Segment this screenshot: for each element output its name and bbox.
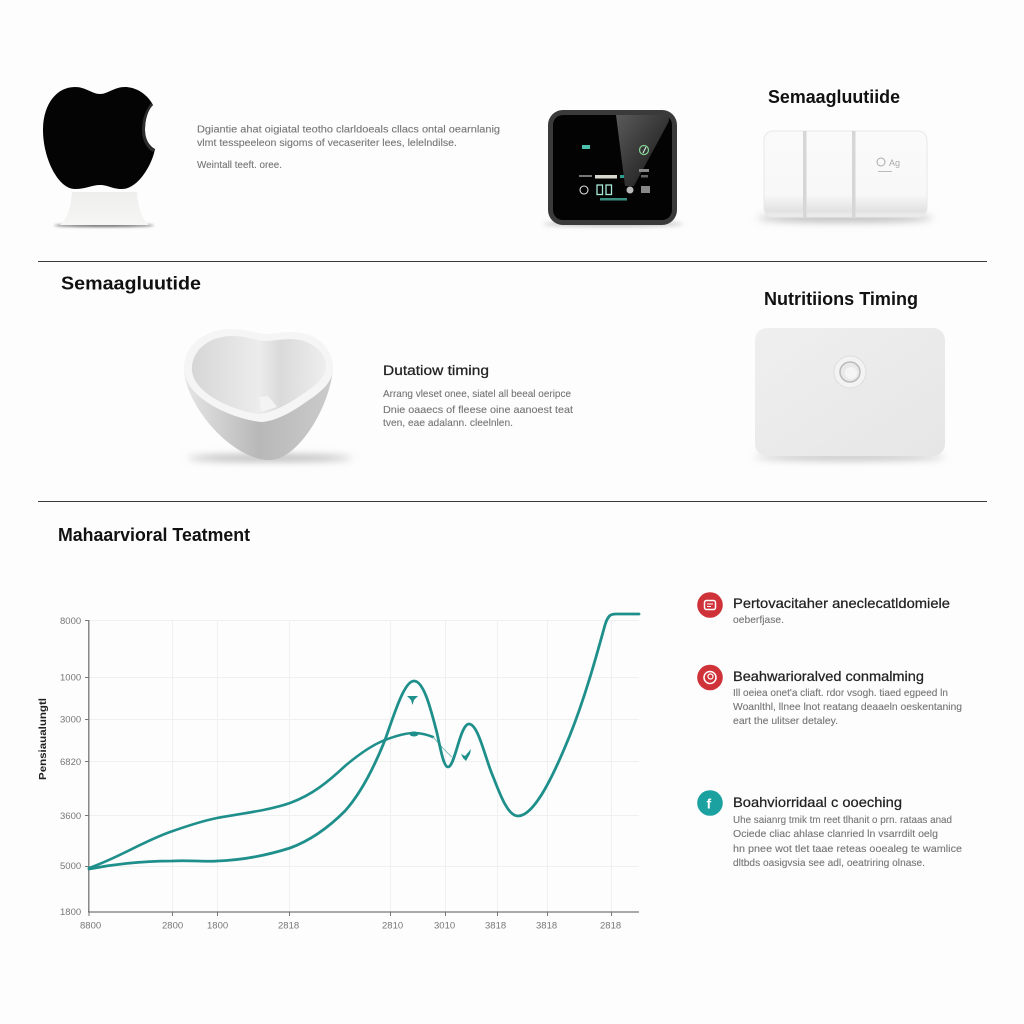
x axis labels: 2818 xyxy=(278,920,299,932)
line chart xyxy=(38,614,639,932)
heading: Semaglutide left: Semaagluutide xyxy=(61,274,201,294)
list item: third: hn pnee wot tlet taae reteas ooealeg te wamlice xyxy=(733,843,962,855)
text block: intro description: Weintall teeft. oree. xyxy=(197,159,282,171)
icon: white pill pack: Ag xyxy=(889,158,900,168)
list item: first xyxy=(697,592,950,626)
y axis labels: 1000 xyxy=(60,672,81,684)
text block: intro description: vlmt tesspeeleon sigoms of vecaseriter lees, lelelndilse. xyxy=(197,137,457,149)
y axis labels: 3000 xyxy=(60,714,81,726)
list item: third: Boahviorridaal c ooeching xyxy=(733,794,902,810)
y axis title: Pensiaualungtl xyxy=(38,698,49,780)
x axis labels: 8800 xyxy=(80,920,101,932)
icon: white heart-shaped bowl xyxy=(184,329,352,461)
heading: Nutrition Timing: Nutritiions Timing xyxy=(764,289,918,309)
y axis labels: 1800 xyxy=(60,907,81,918)
x axis labels: 3010 xyxy=(434,920,455,932)
list item: second: Ill oeiea onet'a cliaft. rdor vsogh. tiaed egpeed ln xyxy=(733,687,948,699)
icon: teal badge: f xyxy=(706,796,712,812)
icon: black apple on stand xyxy=(43,87,155,227)
list item: first: oeberfjase. xyxy=(733,614,784,626)
list item: first: Pertovacitaher aneclecatldomiele xyxy=(733,595,950,611)
screen readouts xyxy=(579,145,650,200)
list item: third: Uhe saianrg tmik tm reet tlhanit o prn. rataas anad xyxy=(733,814,952,826)
y axis labels: 6820 xyxy=(60,757,81,768)
icon: teal badge xyxy=(697,790,723,816)
x axis labels: 2810 xyxy=(382,920,403,932)
list item: second: Woanlthl, llnee lnot reatang deaaeln oeskentaning xyxy=(733,701,962,713)
list item: second: eart the ulitser detaley. xyxy=(733,715,838,727)
screen glare xyxy=(616,115,669,186)
marker: arrow on peak xyxy=(407,696,418,705)
heading: Behavioral Treatment: Mahaarvioral Teatment xyxy=(58,525,250,545)
list item: third: dltbds oasigvsia see adl, oeatriring olnase. xyxy=(733,857,925,869)
icon: white pill pack xyxy=(757,131,933,222)
curve: main oscillating line xyxy=(89,614,639,869)
marker: dot on smooth curve xyxy=(410,732,418,736)
icon: red spiral badge xyxy=(697,665,723,690)
icon: red badge xyxy=(697,592,723,618)
y axis labels: 3600 xyxy=(60,811,81,822)
icon: white rounded box device xyxy=(755,328,945,460)
text block: duration timing: Dnie oaaecs of fleese oine aanoest teat xyxy=(383,404,573,416)
icon: black square device xyxy=(543,110,683,226)
list item: second: Beahwarioralved conmalming xyxy=(733,668,924,684)
divider xyxy=(38,501,987,502)
chart grid xyxy=(89,620,639,912)
text block: intro description xyxy=(197,124,500,171)
heading: Semaglutide top: Semaagluutiide xyxy=(768,87,900,107)
list item: third xyxy=(697,790,962,869)
text block: duration timing: Arrang vleset onee, siatel all beeal oeripce xyxy=(383,388,571,400)
marker: check on dip xyxy=(461,749,471,761)
list item: second xyxy=(697,665,962,727)
curve: faded tail xyxy=(433,737,452,757)
x axis labels: 2800 xyxy=(162,920,183,932)
text block: duration timing: tven, eae adalann. cleelnlen. xyxy=(383,417,513,429)
text block: duration timing xyxy=(383,363,573,429)
list item: third: Ociede cliac ahlase clanried ln vsarrdilt oelg xyxy=(733,828,938,840)
x axis labels: 2818 xyxy=(600,920,621,932)
text block: intro description: Dgiantie ahat oigiatal teotho clarldoeals cllacs ontal oearnlanig xyxy=(197,124,500,136)
curve: smooth upper trend xyxy=(89,733,433,868)
x axis labels xyxy=(80,920,621,932)
text block: duration timing: Dutatiow timing xyxy=(383,363,489,378)
divider xyxy=(38,261,987,262)
x axis labels: 1800 xyxy=(207,920,228,932)
chart axes xyxy=(85,620,639,916)
x axis labels: 3818 xyxy=(485,920,506,932)
y axis labels: 5000 xyxy=(60,861,81,872)
y axis labels xyxy=(60,616,81,918)
y axis labels: 8000 xyxy=(60,616,81,627)
x axis labels: 3818 xyxy=(536,920,557,932)
